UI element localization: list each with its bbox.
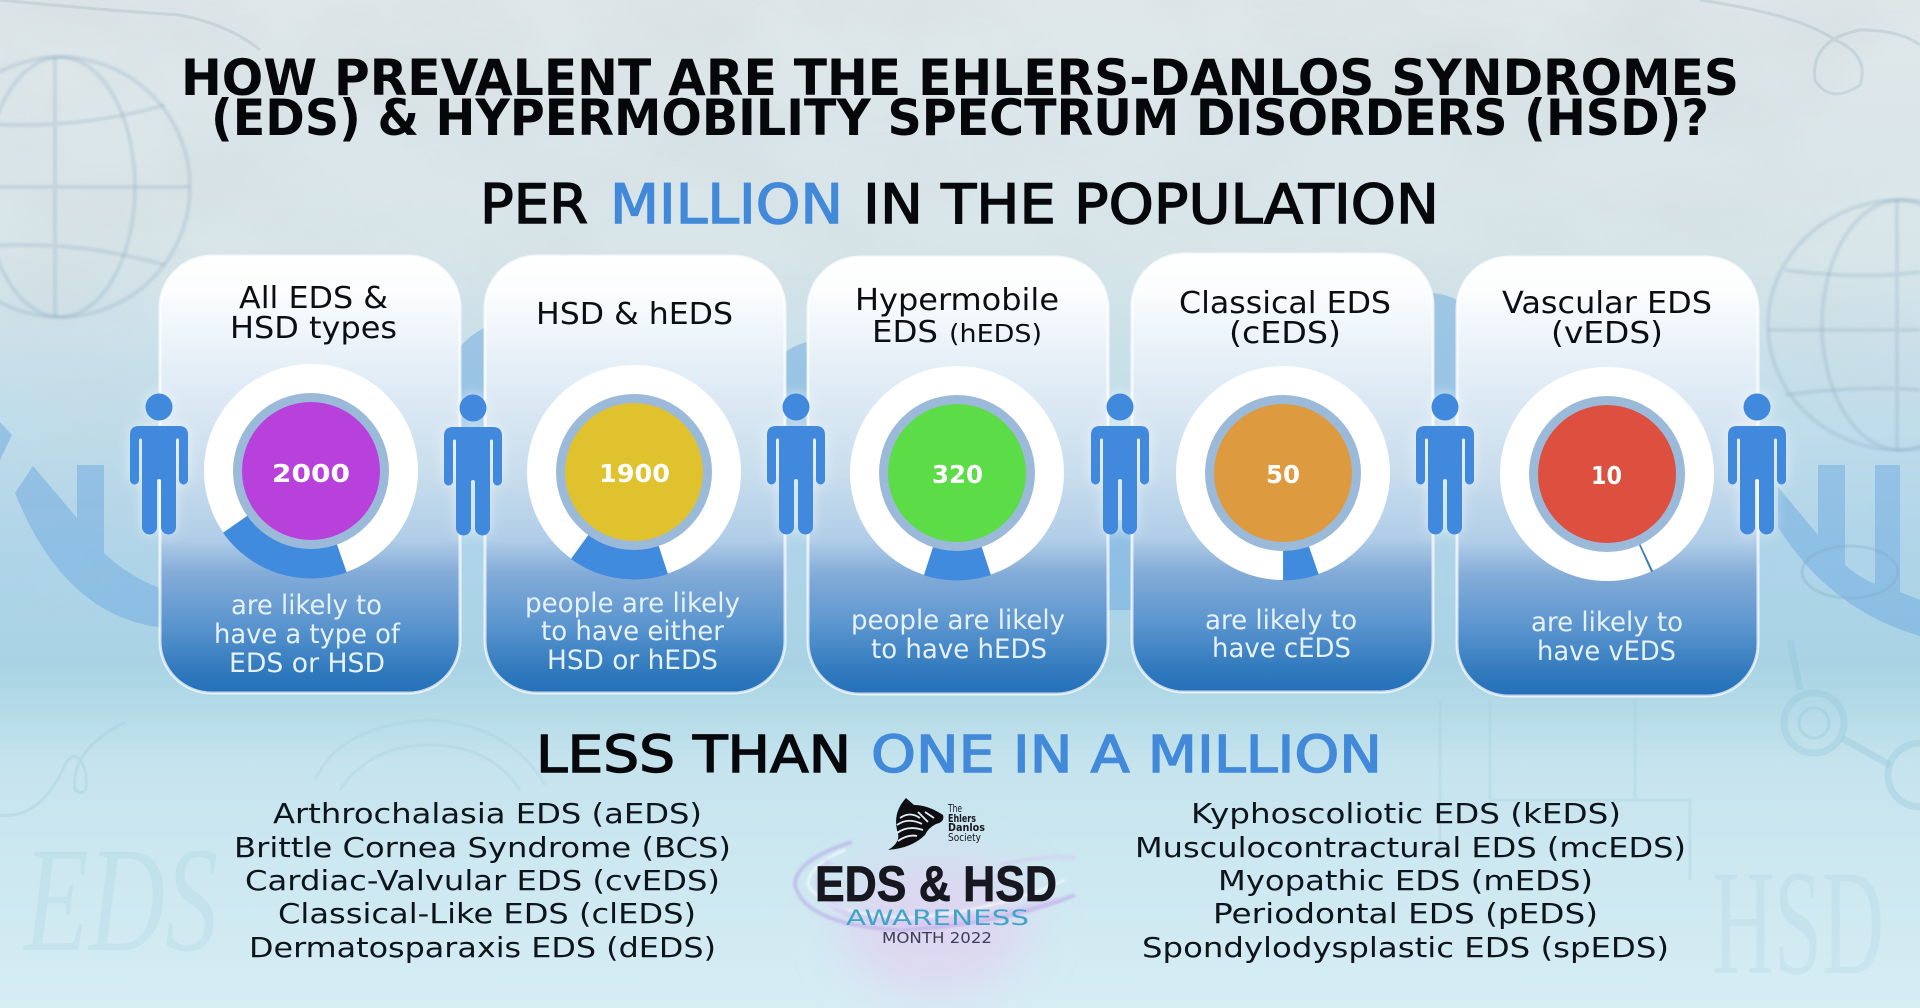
list: rare types right: Periodontal EDS (pEDS) — [1213, 897, 1598, 930]
list: rare types right: Myopathic EDS (mEDS) — [1218, 864, 1593, 897]
card heading: (cEDS) — [1229, 316, 1341, 351]
icon: people row — [130, 393, 1786, 536]
faint centre sketch — [315, 700, 1690, 880]
icon: person 1 — [130, 393, 188, 534]
donut: 320 — [841, 357, 1073, 589]
logo wordmark: EDS & HSD — [815, 856, 1057, 912]
card heading — [1502, 286, 1712, 351]
heading: less than one in a million: ONE IN A MILLION — [871, 726, 1382, 785]
society name: The — [947, 803, 962, 815]
title: HOW PREVALENT ARE THE EHLERS-DANLOS SYNDROMES — [181, 49, 1739, 107]
icon: zebra wolf head — [888, 798, 943, 850]
card caption — [214, 590, 401, 679]
list: rare types left: Brittle Cornea Syndrome (BCS) — [234, 831, 731, 864]
card caption: to have either — [541, 616, 725, 647]
list: rare types right: Spondylodysplastic EDS (spEDS) — [1142, 931, 1669, 964]
list: rare types left: Cardiac-Valvular EDS (cvEDS) — [245, 864, 720, 897]
card caption: people are likely — [525, 588, 740, 619]
heading: less than one in a million — [536, 726, 1382, 785]
list: rare types left: Dermatosparaxis EDS (dEDS) — [249, 931, 716, 964]
logo swirl — [795, 842, 1075, 930]
heading: less than one in a million: LESS THAN — [536, 726, 851, 785]
hatched ellipse right — [1802, 546, 1898, 598]
icon: person 3 — [767, 393, 825, 534]
panel: vascular EDS — [1457, 257, 1758, 696]
list: rare types right: Musculocontractural EDS (mcEDS) — [1135, 831, 1686, 864]
icon: person 2 — [444, 394, 502, 536]
list: rare types right: Kyphoscoliotic EDS (kEDS) — [1191, 797, 1621, 830]
card heading: HSD types — [230, 311, 397, 346]
card caption — [525, 588, 740, 676]
card heading: All EDS & — [239, 281, 388, 316]
icon: person 6 — [1728, 393, 1786, 534]
card caption: are likely to — [231, 590, 382, 621]
card caption: have cEDS — [1212, 633, 1351, 664]
donut: 50: 50 — [1266, 460, 1300, 489]
card heading — [230, 281, 397, 346]
card heading — [855, 283, 1059, 350]
society name: Society — [948, 832, 981, 844]
society name: Ehlers — [948, 813, 976, 825]
card heading: (vEDS) — [1551, 316, 1663, 351]
card caption — [851, 605, 1065, 665]
DNA ribbon right — [1778, 465, 1920, 636]
molecule decoration — [1784, 640, 1920, 807]
globe right — [1768, 200, 1920, 450]
donut: 10 — [1485, 352, 1729, 596]
panel: hypermobile EDS — [808, 257, 1108, 694]
card heading: Hypermobile — [855, 283, 1059, 318]
icon: person 5 — [1416, 393, 1474, 534]
title: (EDS) & HYPERMOBILITY SPECTRUM DISORDERS (HSD)? — [211, 89, 1709, 147]
card heading: (hEDS) — [949, 319, 1042, 348]
card caption: EDS or HSD — [229, 648, 385, 679]
card heading — [1179, 286, 1391, 351]
list: rare types left: Classical-Like EDS (clEDS) — [278, 897, 696, 930]
card caption — [1531, 607, 1683, 667]
panel: HSD and hEDS — [485, 256, 785, 693]
list: rare types right — [1135, 797, 1686, 964]
logo: EDS and HSD awareness month — [795, 798, 1075, 993]
society name: Danlos — [948, 822, 985, 834]
card heading: HSD & hEDS — [536, 297, 733, 332]
card caption: to have hEDS — [871, 634, 1047, 665]
icon: person 4 — [1091, 393, 1149, 534]
background word EDS: EDS — [23, 817, 218, 983]
title — [181, 49, 1739, 147]
heading: per million in the population: PER — [480, 173, 588, 236]
donut: 320: 320 — [932, 460, 983, 489]
donut: 10: 10 — [1591, 461, 1622, 490]
card caption: have vEDS — [1537, 636, 1676, 667]
panel: all EDS and HSD types — [160, 256, 460, 693]
heading: per million in the population: IN THE POPULATION — [863, 173, 1439, 236]
card caption: are likely to — [1205, 605, 1357, 636]
card caption: have a type of — [214, 619, 401, 650]
panel: classical EDS — [1132, 254, 1433, 692]
donut: 2000 — [194, 354, 428, 588]
donut: 2000: 2000 — [272, 459, 350, 488]
card heading: Vascular EDS — [1502, 286, 1712, 321]
donut: 1900 — [518, 356, 750, 588]
card caption: HSD or hEDS — [547, 645, 718, 676]
society name — [947, 803, 985, 844]
globe left — [0, 57, 190, 317]
heading: per million in the population — [480, 173, 1439, 236]
donut: 50 — [1166, 356, 1400, 590]
card caption — [1205, 605, 1357, 664]
card caption: are likely to — [1531, 607, 1683, 638]
logo month: MONTH 2022 — [882, 929, 992, 947]
DNA ribbon left — [0, 293, 1457, 628]
list: rare types left: Arthrochalasia EDS (aEDS) — [273, 797, 702, 830]
donut: 1900: 1900 — [599, 459, 670, 488]
card caption: people are likely — [851, 605, 1065, 636]
card heading: Classical EDS — [1179, 286, 1391, 321]
heading: per million in the population: MILLION — [610, 173, 843, 236]
logo awareness: AWARENESS — [846, 906, 1029, 930]
card heading: EDS — [872, 315, 938, 350]
list: rare types left — [234, 797, 731, 964]
